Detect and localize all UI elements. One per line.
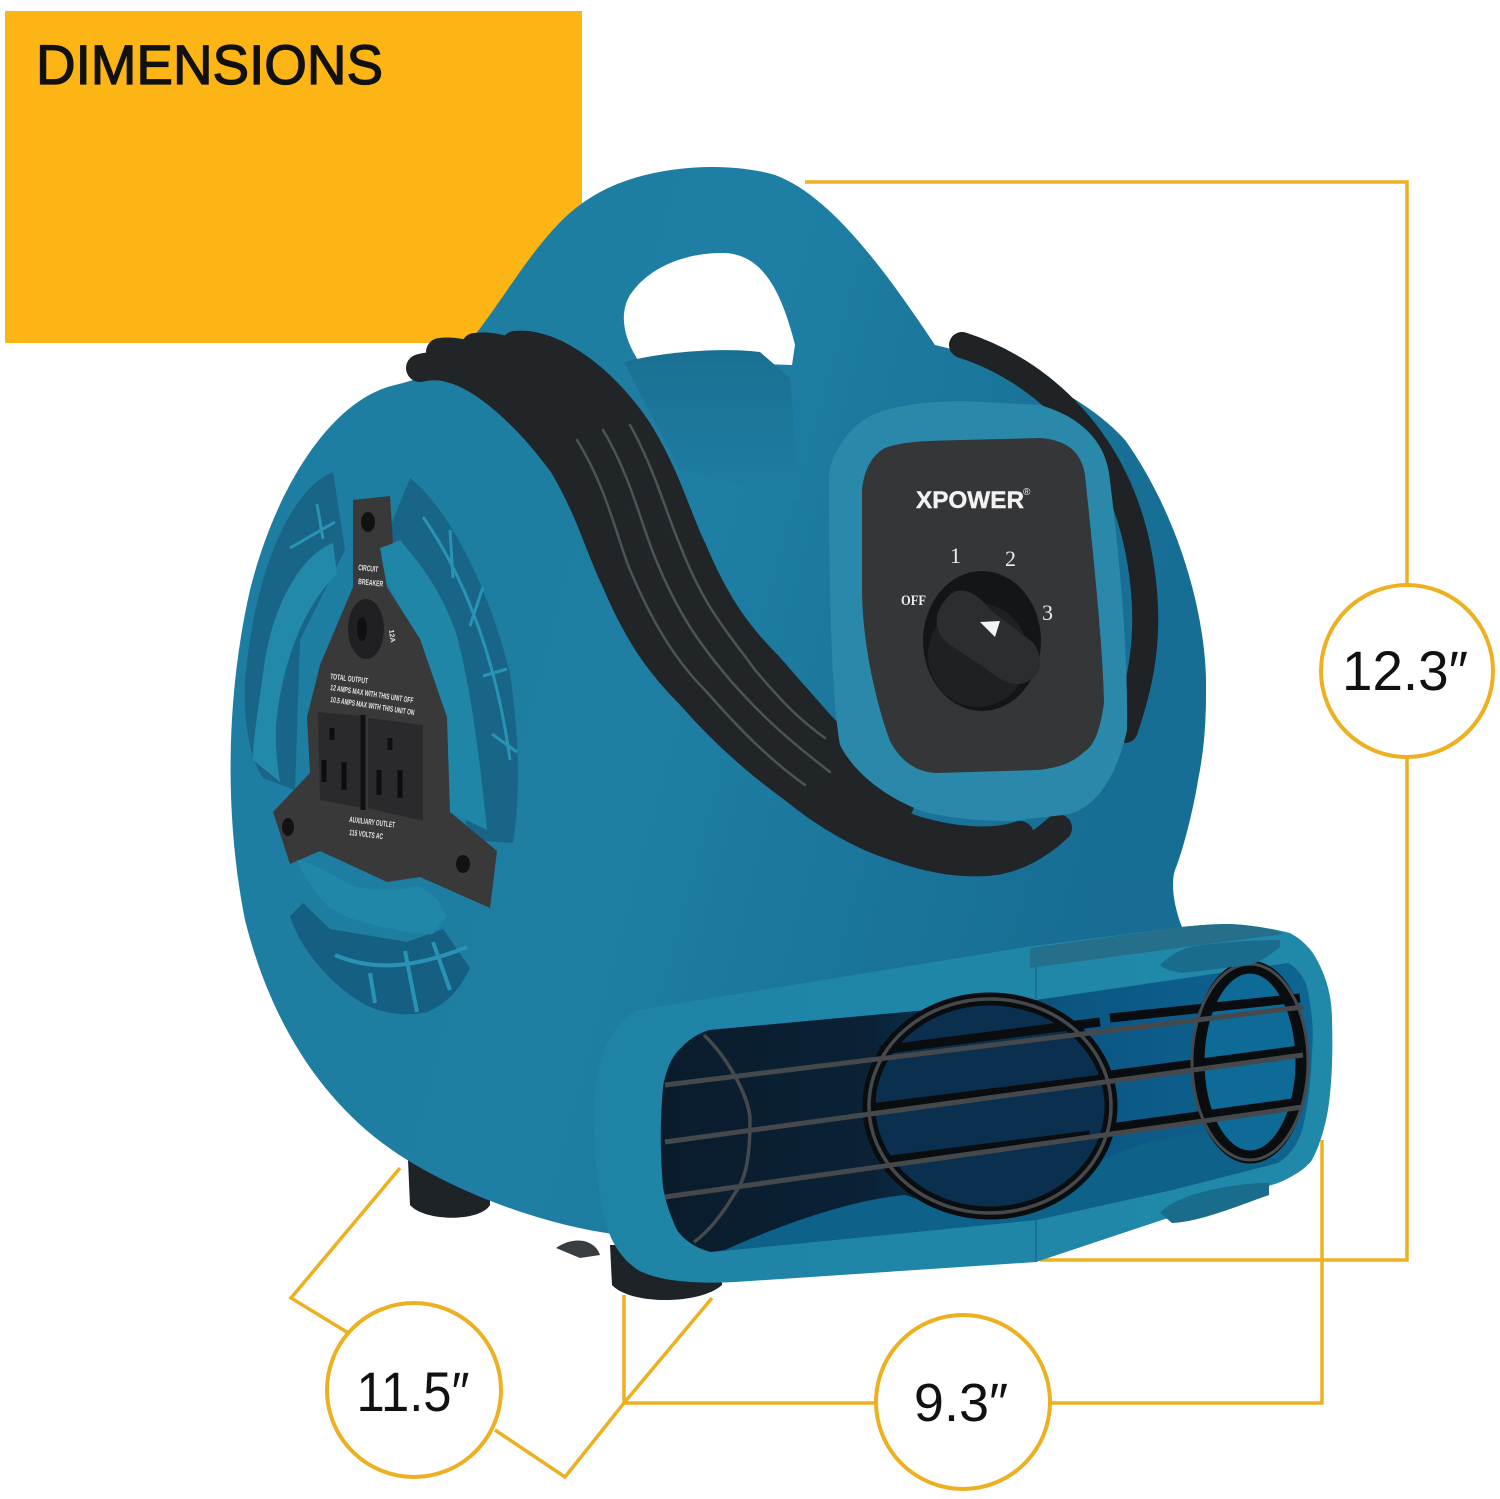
small fan circle [1198, 967, 1302, 1157]
callout: width: 9.3″ [914, 1373, 1008, 1433]
left vent opening [245, 472, 345, 790]
vent opening [661, 963, 1313, 1252]
speed labels [901, 543, 1053, 625]
speed labels: 3 [1042, 600, 1053, 625]
raised ring left [253, 543, 337, 782]
vent floor [711, 1130, 1278, 1252]
coiled power cord [420, 345, 1145, 862]
mounting holes [282, 512, 470, 873]
right housing shading [1100, 440, 1206, 880]
control knob [923, 571, 1041, 711]
lower vent opening [290, 903, 470, 1014]
strand highlights [577, 425, 830, 785]
title: DIMENSIONS [36, 33, 383, 96]
speed labels: OFF [901, 593, 926, 609]
outlet plate [273, 496, 497, 908]
dimension lines [291, 182, 1407, 1477]
speed labels: 1 [950, 543, 961, 568]
brand logo: XPOWER [916, 487, 1024, 514]
plate small text: TOTAL OUTPUT [330, 672, 369, 686]
rim seams [1035, 947, 1037, 1262]
right vent opening [385, 478, 518, 843]
vent ribs [290, 504, 517, 1012]
plate small text: BREAKER [358, 577, 384, 589]
control panel [862, 438, 1104, 773]
plate small text: CIRCUIT [358, 563, 379, 574]
callout: height: 12.3″ [1342, 639, 1468, 702]
raised ring right [380, 540, 487, 830]
snout top band [1030, 924, 1285, 968]
feet [408, 1160, 722, 1300]
plate small text: 115 VOLTS AC [349, 828, 384, 841]
control panel bezel [829, 401, 1127, 821]
plate small text: 12A [387, 629, 396, 643]
plate small text [330, 563, 415, 841]
callout: depth: 11.5″ [356, 1360, 470, 1423]
lower raised ring [297, 860, 447, 934]
plate small text: AUXILIARY OUTLET [349, 815, 396, 830]
outlet sockets [318, 712, 363, 808]
speed labels: 2 [1005, 546, 1016, 571]
registered mark: ® [1023, 487, 1031, 498]
callout: depth [327, 1303, 501, 1477]
grille shadow bands [870, 998, 1300, 1160]
heading panel [5, 11, 582, 343]
plate small text: 10.5 AMPS MAX WITH THIS UNIT ON [330, 695, 415, 717]
handle opening [624, 253, 795, 365]
main body [231, 167, 1206, 1242]
plate small text: 12 AMPS MAX WITH THIS UNIT OFF [330, 683, 414, 705]
grille frame [665, 964, 1308, 1242]
right cord [962, 345, 1145, 730]
housing dome behind handle [624, 350, 800, 500]
large fan circle [869, 999, 1111, 1213]
air mover product [231, 167, 1332, 1300]
rim fins [1160, 940, 1280, 973]
side vents [245, 472, 518, 1014]
air outlet snout [594, 924, 1332, 1283]
circuit breaker [348, 599, 384, 659]
callout: height [1321, 585, 1493, 757]
callout: width [876, 1315, 1050, 1489]
strands [420, 345, 1058, 862]
